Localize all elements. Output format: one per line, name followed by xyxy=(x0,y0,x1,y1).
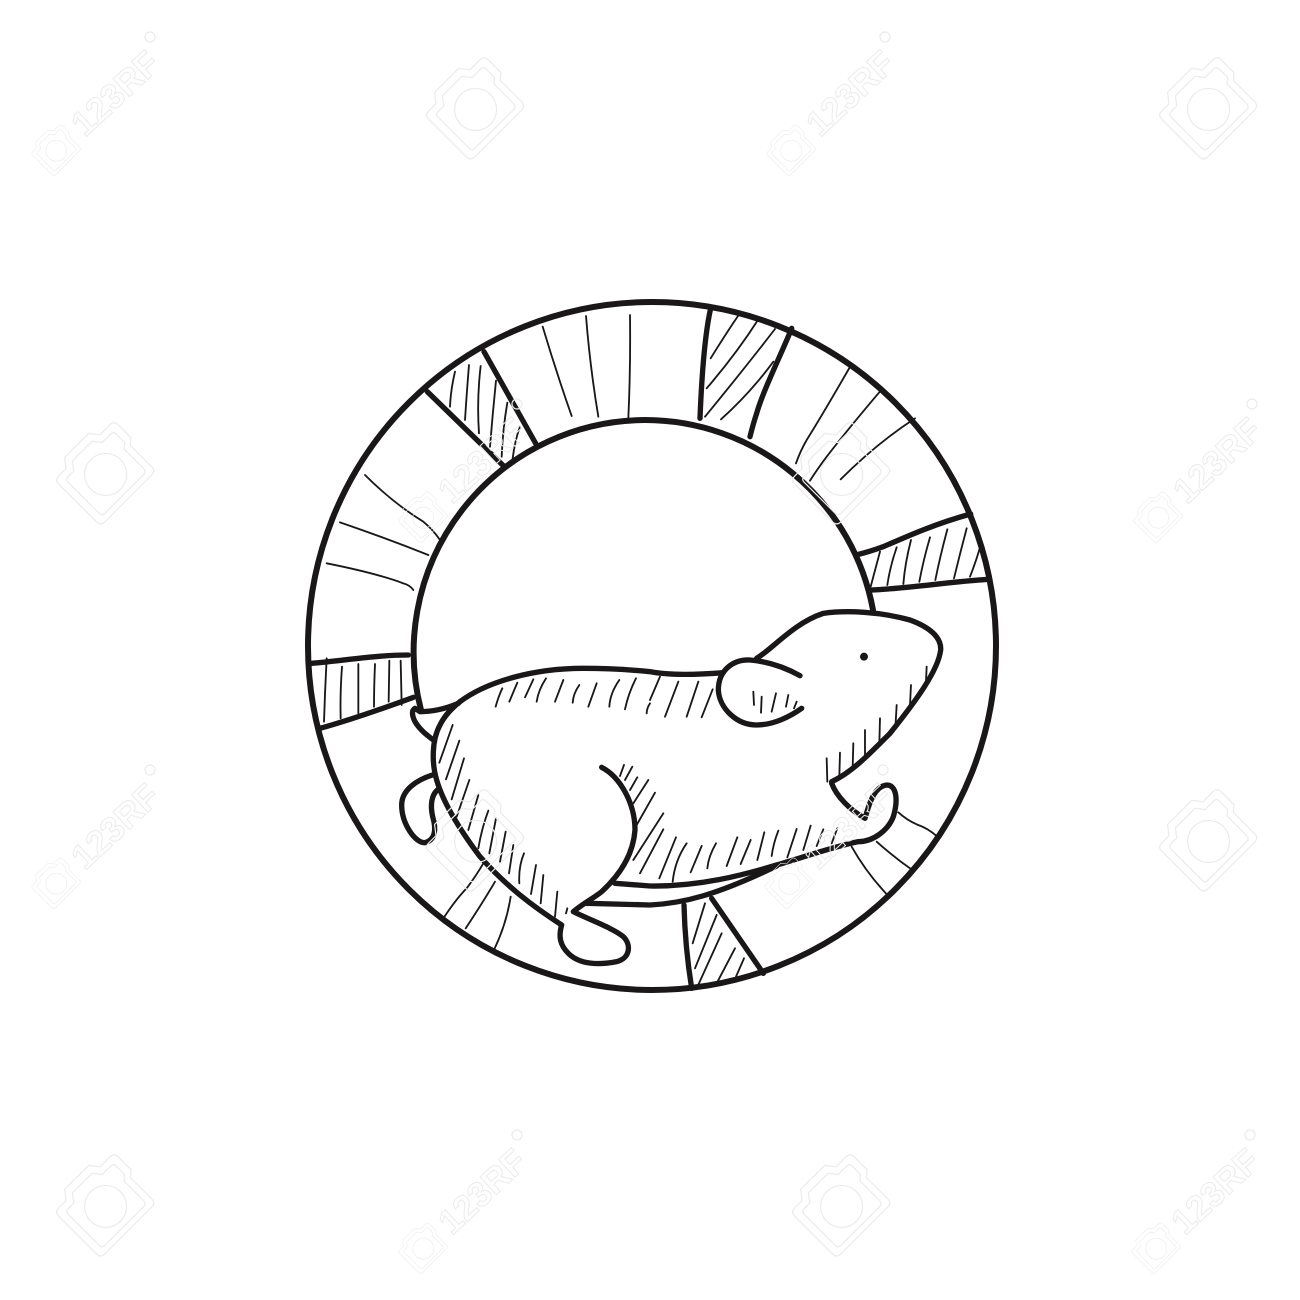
left rung and hatching xyxy=(312,655,511,950)
watermark bottom right xyxy=(1128,1130,1267,1275)
eye xyxy=(860,653,868,661)
ear xyxy=(718,660,802,725)
back foot xyxy=(402,775,437,843)
watermark second row right: 123RF xyxy=(1166,411,1269,511)
outer rim xyxy=(308,302,996,990)
lower belly line xyxy=(587,866,777,905)
fur hatching xyxy=(496,678,650,713)
watermark top middle xyxy=(763,32,902,177)
body outline xyxy=(460,668,723,702)
tail xyxy=(412,703,458,740)
watermark third row middle xyxy=(761,765,900,910)
watermark top middle: 123RF xyxy=(799,44,902,144)
inner rim arc xyxy=(414,420,873,710)
watermark third row left: 123RF xyxy=(64,777,167,877)
head xyxy=(757,612,941,782)
hind leg and rump xyxy=(433,702,635,964)
watermark bottom right: 123RF xyxy=(1164,1142,1267,1242)
watermark top left xyxy=(28,32,167,177)
hamster wheel xyxy=(308,302,996,990)
upper right rungs and hatching xyxy=(700,308,988,590)
watermark bottom middle xyxy=(395,1130,534,1275)
watermark second row right xyxy=(1130,399,1269,544)
front paw and belly xyxy=(615,783,896,886)
watermark second row middle: 123RF xyxy=(431,411,534,511)
upper left rung and hatching xyxy=(327,315,630,590)
watermark top left: 123RF xyxy=(64,44,167,144)
watermark third row left xyxy=(28,765,167,910)
bottom rung and hatching xyxy=(684,812,937,988)
watermark third row middle: 123RF xyxy=(797,777,900,877)
watermark bottom middle: 123RF xyxy=(431,1142,534,1242)
watermark second row middle xyxy=(395,399,534,544)
hamster xyxy=(402,612,941,964)
